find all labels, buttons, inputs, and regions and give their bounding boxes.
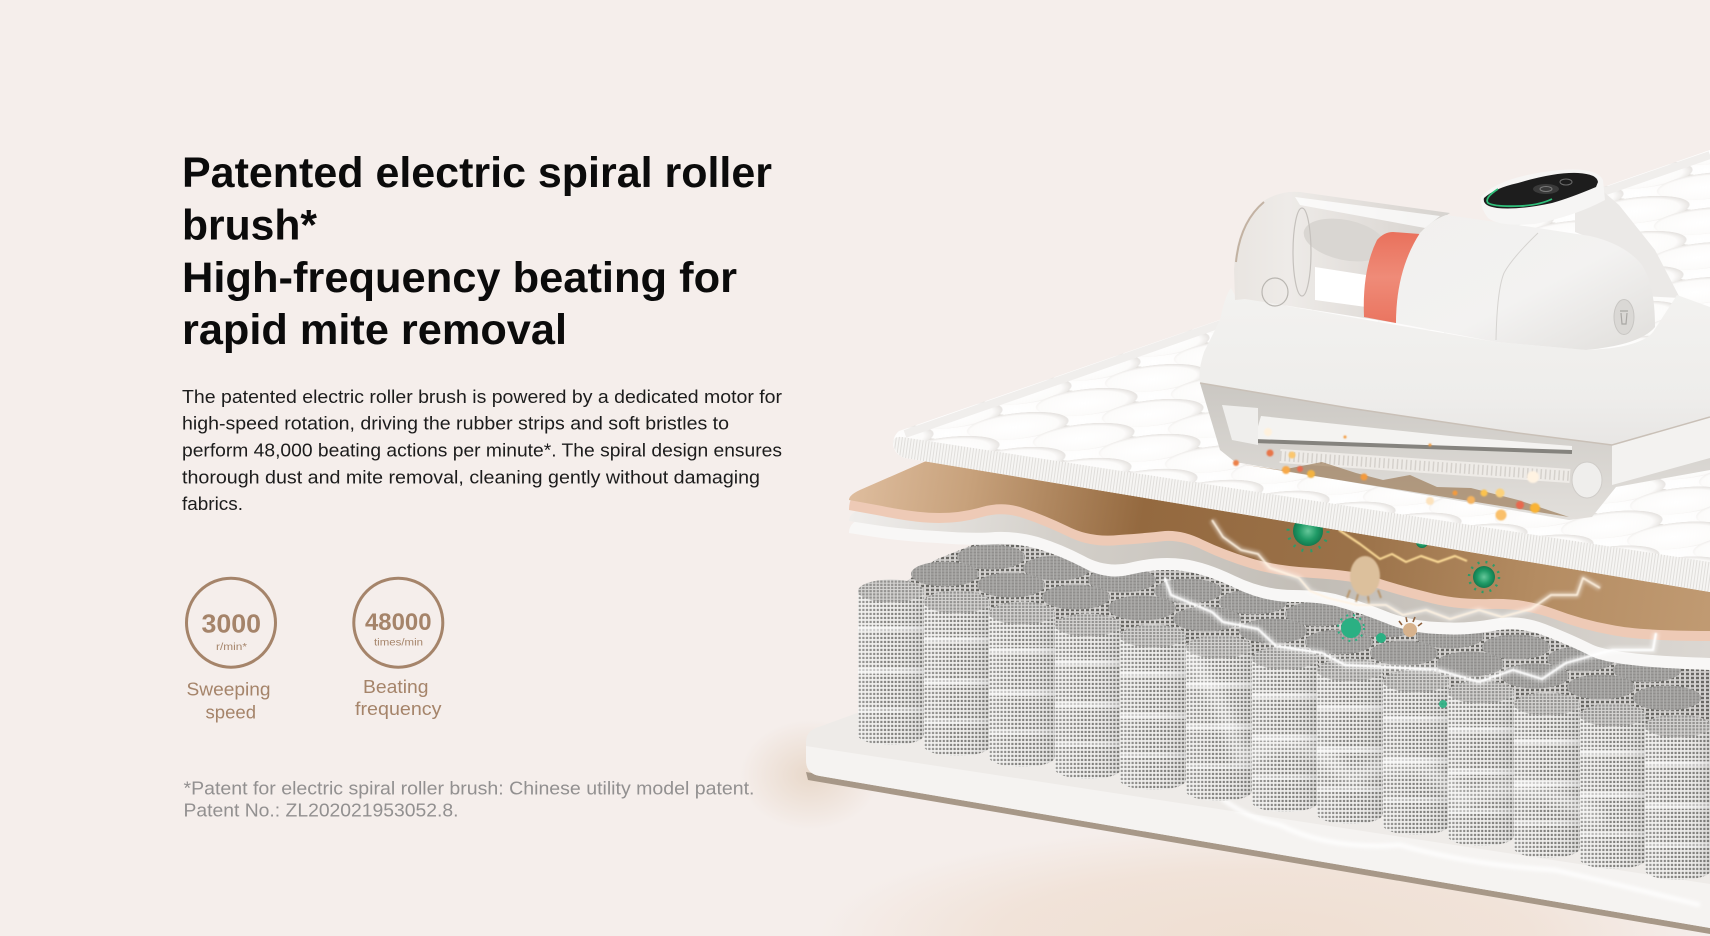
tan comfort layer: [849, 455, 1710, 641]
energy wave: yellow: [1339, 530, 1467, 562]
mattress front ribbed edge: [893, 437, 1710, 592]
bristle strip: [1280, 456, 1570, 476]
back row two tops: [957, 544, 1681, 682]
device: transparent dust cup: [1234, 192, 1450, 323]
stat: sweeping speed: speed: [206, 702, 256, 722]
footnote: [184, 778, 755, 820]
title: rapid mite removal: [182, 306, 567, 354]
stat: beating frequency: frequency: [355, 698, 442, 719]
right white side panel: [1612, 417, 1710, 485]
roller end caps: [1222, 405, 1258, 445]
virus: right green: [1469, 562, 1499, 592]
spring coils: back rows: [895, 540, 1710, 810]
description paragraph: The patented electric roller brush is powered by a dedicated motor for: [182, 386, 782, 407]
title: Patented electric spiral roller: [182, 149, 772, 197]
stat: sweeping speed: r/min*: [216, 641, 247, 653]
mite: large tan mite: [1347, 556, 1381, 604]
green status arc: [1487, 189, 1552, 206]
virus: large green: [1288, 511, 1328, 551]
device: clear brush housing: [1200, 380, 1710, 520]
description paragraph: thorough dust and mite removal, cleaning gently without damaging: [182, 466, 760, 488]
title: High-frequency beating for: [182, 254, 737, 302]
chrome rod: [1254, 416, 1572, 452]
dust wave: [1240, 462, 1569, 517]
stat ring 3000: [186, 578, 276, 667]
title: [182, 149, 772, 354]
footnote: Patent No.: ZL202021953052.8.: [184, 800, 458, 820]
white foam layer: [849, 488, 1710, 670]
device: handle arm: [1575, 180, 1680, 298]
stat: sweeping speed: [186, 578, 276, 722]
device: white motor body: [1396, 215, 1655, 350]
stat: beating frequency: Beating: [363, 676, 428, 697]
back row one tops: [911, 562, 1701, 710]
description paragraph: fabrics.: [182, 493, 243, 514]
footnote: *Patent for electric spiral roller brush: Chinese utility model patent.: [184, 778, 755, 798]
energy wave: white through springs: [1165, 578, 1656, 682]
dust bin button: [1614, 300, 1634, 334]
device: control panel: [1481, 169, 1605, 225]
cup inner highlight: [1295, 197, 1440, 228]
device: sparks: [1233, 428, 1540, 520]
top quilted mattress: [893, 150, 1710, 592]
spring coils: front row cylinders: [858, 580, 1710, 880]
stat: beating frequency: 48000: [365, 609, 432, 636]
description paragraph: high-speed rotation, driving the rubber strips and soft bristles to: [182, 412, 729, 434]
title: brush*: [182, 202, 317, 250]
device: main tray body: [1200, 288, 1710, 445]
description paragraph: [182, 386, 782, 514]
mattress back rim: [905, 155, 1710, 434]
mite: small: [1399, 617, 1422, 637]
stat: beating frequency: [354, 578, 443, 719]
stat: beating frequency: times/min: [374, 636, 423, 648]
stat ring 48000: [354, 578, 443, 667]
energy wave: white through tan layer: [1212, 520, 1600, 619]
virus: small under mattress: [1416, 536, 1428, 548]
stat: sweeping speed: 3000: [202, 608, 261, 638]
floor glow under mattress: [720, 690, 1710, 936]
description paragraph: perform 48,000 beating actions per minute*. The spiral design ensures: [182, 440, 782, 460]
virus: between layers: [1338, 615, 1447, 708]
mattress base slab: [806, 712, 1710, 934]
device: salmon band: [1364, 232, 1420, 323]
stat: sweeping speed: Sweeping: [186, 678, 270, 700]
